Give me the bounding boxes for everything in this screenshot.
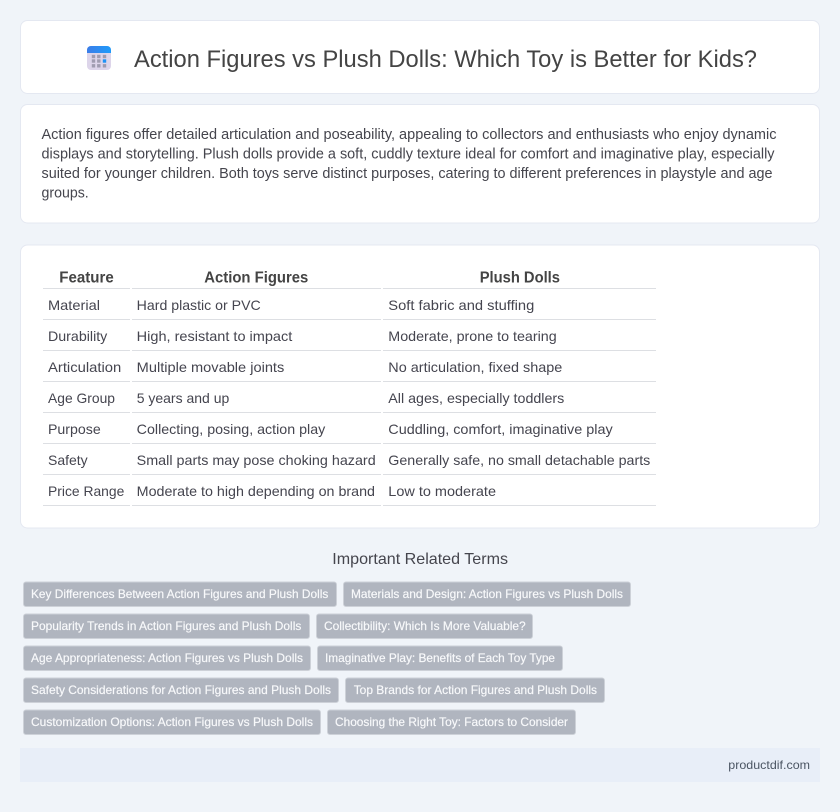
tag xyxy=(316,614,532,638)
tag: Safety Considerations for Action Figures and Plush Dolls xyxy=(31,683,331,697)
text block: intro paragraph xyxy=(42,127,777,202)
table row: age group xyxy=(48,390,564,406)
table row: durability: High, resistant to impact xyxy=(137,328,292,344)
tag xyxy=(24,614,310,638)
table row: price range: Moderate to high depending on brand xyxy=(137,483,375,499)
tag: Top Brands for Action Figures and Plush Dolls xyxy=(354,683,597,697)
table row: purpose: Purpose xyxy=(48,421,101,437)
panel: intro text xyxy=(20,104,820,223)
table header row: Feature xyxy=(59,270,114,287)
tag xyxy=(24,678,338,702)
text block: intro paragraph: groups. xyxy=(42,186,89,202)
tag xyxy=(24,582,336,606)
footer source text: productdif.com xyxy=(728,758,810,772)
table row: articulation: Articulation xyxy=(48,359,121,375)
table row: material: Soft fabric and stuffing xyxy=(388,297,534,313)
table row: age group: Age Group xyxy=(48,390,115,406)
table row: purpose: Cuddling, comfort, imaginative play xyxy=(388,421,613,437)
tag: Choosing the Right Toy: Factors to Consider xyxy=(335,715,568,729)
tag xyxy=(24,646,310,670)
tag xyxy=(328,710,576,734)
table row: safety: Generally safe, no small detachable parts xyxy=(388,452,650,468)
table header row: Plush Dolls xyxy=(480,270,560,287)
title: Action Figures vs Plush Dolls: Which Toy is Better for Kids? xyxy=(134,46,757,73)
panel: header xyxy=(20,20,820,94)
tag: Imaginative Play: Benefits of Each Toy Type xyxy=(325,651,555,665)
table row: safety: Safety xyxy=(48,452,88,468)
footer xyxy=(20,748,820,782)
table header row xyxy=(59,270,560,287)
tag xyxy=(344,582,630,606)
table row: articulation xyxy=(48,359,563,375)
table row: age group: 5 years and up xyxy=(137,390,230,406)
table row: material: Material xyxy=(48,297,100,313)
panel: comparison table xyxy=(20,245,820,528)
table row: safety xyxy=(48,452,650,468)
panel: related term tags xyxy=(24,582,630,734)
tag: Key Differences Between Action Figures and Plush Dolls xyxy=(31,587,328,601)
tag: Popularity Trends in Action Figures and Plush Dolls xyxy=(31,619,301,633)
table row: material xyxy=(48,297,534,313)
tag: Age Appropriateness: Action Figures vs Plush Dolls xyxy=(31,651,303,665)
tag: Materials and Design: Action Figures vs Plush Dolls xyxy=(351,587,623,601)
tag: Customization Options: Action Figures vs Plush Dolls xyxy=(31,715,313,729)
text block: intro paragraph: suited for younger children. Both toys serve distinct purposes, catering to different preferences in playstyle and age xyxy=(42,166,772,182)
table row: purpose: Collecting, posing, action play xyxy=(137,421,325,437)
table row: purpose xyxy=(48,421,613,437)
table row: price range xyxy=(48,483,496,499)
icon: calendar xyxy=(87,46,111,70)
tag xyxy=(346,678,604,702)
table row: durability: Moderate, prone to tearing xyxy=(388,328,557,344)
table header row: Action Figures xyxy=(204,270,308,287)
table row: articulation: Multiple movable joints xyxy=(137,359,284,375)
tag xyxy=(318,646,562,670)
text block: intro paragraph: Action figures offer detailed articulation and poseability, appealing to collectors and enthusiasts who enjoy dynamic xyxy=(42,127,777,143)
heading: important related terms: Important Related Terms xyxy=(332,551,508,568)
text block: intro paragraph: displays and storytelling. Plush dolls provide a soft, cuddly texture ideal for comfort and imaginative play, especially xyxy=(42,146,775,162)
tag: Collectibility: Which Is More Valuable? xyxy=(324,619,526,633)
table row: material: Hard plastic or PVC xyxy=(137,297,261,313)
table row: durability: Durability xyxy=(48,328,107,344)
table row: price range: Low to moderate xyxy=(388,483,496,499)
table row: price range: Price Range xyxy=(48,483,125,499)
table row: safety: Small parts may pose choking hazard xyxy=(137,452,376,468)
tag xyxy=(24,710,320,734)
table row: articulation: No articulation, fixed shape xyxy=(388,359,563,375)
table row: durability xyxy=(48,328,557,344)
table row: age group: All ages, especially toddlers xyxy=(388,390,564,406)
